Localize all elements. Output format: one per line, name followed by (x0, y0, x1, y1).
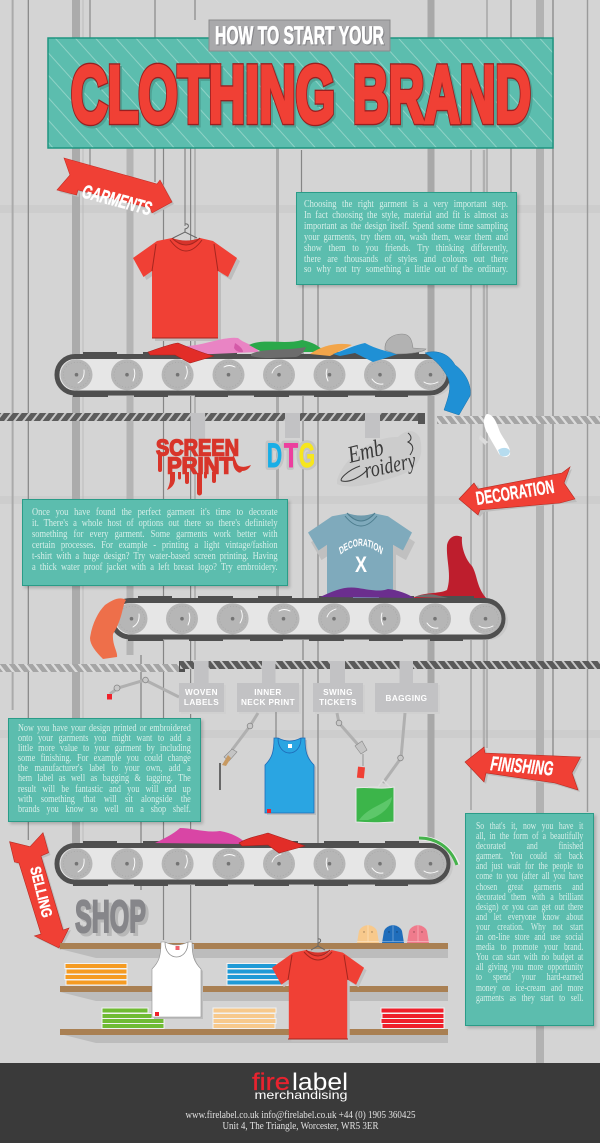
text: garments paragraph: show them to you friends. Try thinking differently, (304, 243, 508, 254)
conveyor belt 1 (57, 352, 453, 397)
text: garments paragraph: Choosing the right garment is a very important step. (304, 199, 508, 210)
text: decoration paragraph (32, 507, 278, 573)
arrow: garments: GARMENTS (80, 182, 154, 220)
text: garments paragraph: your garments, try them on, wash them, wear them and (304, 232, 508, 243)
red garment falling on conveyor 2 (413, 536, 488, 600)
logo: DTG (266, 437, 316, 475)
blue tank top on strings (265, 669, 316, 815)
footer bar (0, 1063, 600, 1143)
logo: screen print (156, 434, 251, 496)
text: garments paragraph: important as the design itself. Spend some time sampling (304, 221, 508, 232)
text: finishing paragraph: with something that will sit alongside the (18, 794, 191, 805)
logo: embroidery: roidery (362, 447, 419, 483)
text: selling paragraph: come to you (after all you have (476, 871, 583, 882)
text: garments paragraph (304, 199, 508, 275)
text: finishing paragraph: Now you have your design printed or embroidered (18, 723, 191, 734)
logo: embroidery: Emb (344, 435, 386, 469)
footer logo: merchandising (254, 1088, 348, 1102)
text: selling paragraph: an on-line store and use social (476, 932, 583, 943)
logo: screen print: PRINT (167, 452, 233, 478)
footer contact details: www.firelabel.co.uk info@firelabel.co.uk +44 (0) 1905 360425 (186, 1110, 416, 1121)
text: selling paragraph: decorated and finished (476, 841, 583, 852)
plate: bagging (375, 661, 440, 714)
folded stack: red (381, 1008, 444, 1028)
subtitle plate: HOW TO START YOUR (216, 23, 385, 51)
text: selling paragraph: all, in the form of a beautifully (476, 831, 583, 842)
folded stack: peach (213, 1008, 276, 1028)
panel: selling (465, 813, 594, 1026)
conveyor belt 2 (112, 596, 508, 641)
plate: inner neck print: NECK PRINT (241, 698, 295, 707)
text: finishing paragraph (18, 723, 191, 815)
text: decoration paragraph: a thick water proof jacket with a left breast logo? Try embroidery. (32, 562, 278, 573)
subtitle plate (209, 20, 390, 51)
logo: DTG: DTG (266, 437, 316, 475)
arrow: garments (57, 158, 174, 220)
logo: DTG: T (284, 437, 298, 475)
plate: bagging: BAGGING (386, 694, 427, 703)
robot arm: neck print brush (220, 713, 258, 790)
footer logo (252, 1069, 348, 1102)
clothes pile on conveyor 3 (155, 828, 458, 865)
robot arm and green bag (356, 713, 405, 823)
text: selling paragraph: garment. You could sit back (476, 851, 583, 862)
logo: screen print: SCREEN (156, 434, 239, 460)
rebar beam 2 (0, 661, 600, 672)
logo: embroidery (337, 431, 421, 486)
caps on shelf (357, 925, 429, 943)
conveyor belt 3 (57, 841, 453, 886)
text: selling paragraph: to spend your hard-earned (476, 972, 583, 983)
plate: woven labels (179, 661, 226, 714)
arrow: selling (10, 833, 71, 950)
shop sign: SHOP (78, 894, 149, 945)
folded stack: green (102, 1008, 164, 1028)
finishing arrow: FINISHING (490, 753, 554, 780)
text: finishing paragraph: result will be fantastic and you will end up (18, 784, 191, 795)
text: selling paragraph: and just wait for the people to (476, 861, 583, 872)
title panel (48, 38, 553, 148)
text: selling paragraph: design) or you can get out there (476, 902, 583, 913)
text: finishing paragraph: hem label as well as bagging & tagging. The (18, 773, 191, 784)
text: decoration paragraph: it. There's a whole host of options out there so there's definitely (32, 518, 278, 529)
arrow: decoration (459, 467, 577, 517)
arrow: selling: SELLING (26, 865, 55, 919)
text: garments paragraph: In fact choosing the style, material and fit is almost as (304, 210, 508, 221)
text: selling paragraph: your creation. Why not start (476, 922, 583, 933)
text: garments paragraph: so why not try something a little out of the ordinary. (304, 264, 508, 275)
footer logo: label (292, 1069, 348, 1096)
text: finishing paragraph: the manufacturer's label to your own, add a (18, 763, 191, 774)
text: selling paragraph: You can start with no budget at (476, 952, 583, 963)
hanging red t-shirt with hanger (133, 148, 240, 341)
text: finishing paragraph: some finishing. For example you could change (18, 753, 191, 764)
plate: inner neck print (237, 661, 301, 714)
text: selling paragraph: chosen great garments and (476, 882, 583, 893)
title: clothing brand: CLOTHING (71, 50, 335, 140)
panel: choosing the right garment (296, 192, 517, 285)
logo: DTG: D (267, 437, 282, 475)
title: clothing brand: CLOTHING (73, 52, 337, 142)
text: decoration paragraph: certain processes. For example - printing a light vintage/fashion (32, 540, 278, 551)
footer contact details: Unit 4, The Triangle, Worcester, WR5 3ER (222, 1121, 379, 1132)
text: selling paragraph: money on ice-cream and more (476, 982, 583, 994)
rebar beam 1 (0, 413, 600, 424)
title: clothing brand: CLOTHING (71, 50, 335, 140)
footer contact details (186, 1110, 416, 1132)
arrow: decoration: DECORATION (474, 477, 556, 510)
text: selling paragraph: garments as they start to sell. (476, 993, 583, 1004)
text: decoration paragraph: Once you have found the perfect garment it's time to decorate (32, 507, 278, 518)
plate: woven labels: LABELS (184, 698, 219, 707)
robot arm: woven labels (107, 677, 179, 700)
blue decoration t-shirt (308, 512, 415, 598)
robot spray glove (479, 414, 510, 457)
blue decoration t-shirt: DECORATION (338, 538, 384, 554)
text: selling paragraph: and let everyone know about (476, 912, 583, 923)
folded stack: orange (65, 964, 127, 985)
text: finishing paragraph: onto your garments you might want to add a (18, 733, 191, 744)
finishing arrow (465, 747, 582, 792)
plate: swing tickets: SWING (323, 688, 353, 697)
text: selling paragraph: media to promote your brand. (476, 942, 583, 953)
plate: woven labels: WOVEN (185, 688, 218, 697)
robot arm: swing tag (336, 713, 367, 778)
text: decoration paragraph: something for every garment. Some garments work better with (32, 529, 278, 540)
text: selling paragraph: all giving you more opportunity (476, 962, 583, 973)
subtitle plate: HOW TO START YOUR (215, 22, 384, 50)
text: selling paragraph (476, 821, 584, 1004)
footer logo: fire (252, 1069, 290, 1096)
text: finishing paragraph: little more value to your garment by including (18, 743, 191, 754)
white tank top (152, 942, 203, 1019)
folded stack: blue (227, 964, 287, 985)
shop sign (75, 891, 149, 945)
logo: DTG: G (299, 437, 315, 475)
clothes pile on conveyor 1 (148, 334, 470, 415)
text: selling paragraph: decorated them with a brilliant (476, 892, 583, 903)
text: garments paragraph: there are thousands of styles and colours out there (304, 254, 508, 265)
plate: swing tickets (313, 661, 365, 714)
text: finishing paragraph: brands you know so well on a shop shelf. (18, 804, 191, 815)
panel: decoration (22, 499, 288, 586)
shop red t-shirt with hanger (272, 939, 367, 1042)
text: selling paragraph: So that's it, now you have it (476, 821, 583, 832)
clothes pile on conveyor 2 (90, 587, 448, 659)
shop sign: SHOP (75, 891, 146, 942)
plate: inner neck print: INNER (254, 688, 282, 697)
plate: swing tickets: TICKETS (319, 698, 357, 707)
printing tool stems (191, 413, 380, 440)
panel: finishing (8, 718, 201, 822)
blue decoration t-shirt: X (355, 552, 367, 577)
text: decoration paragraph: t-shirt with a huge design? Try water-based screen printing. Having (32, 551, 278, 562)
shop shelves (60, 943, 448, 1043)
